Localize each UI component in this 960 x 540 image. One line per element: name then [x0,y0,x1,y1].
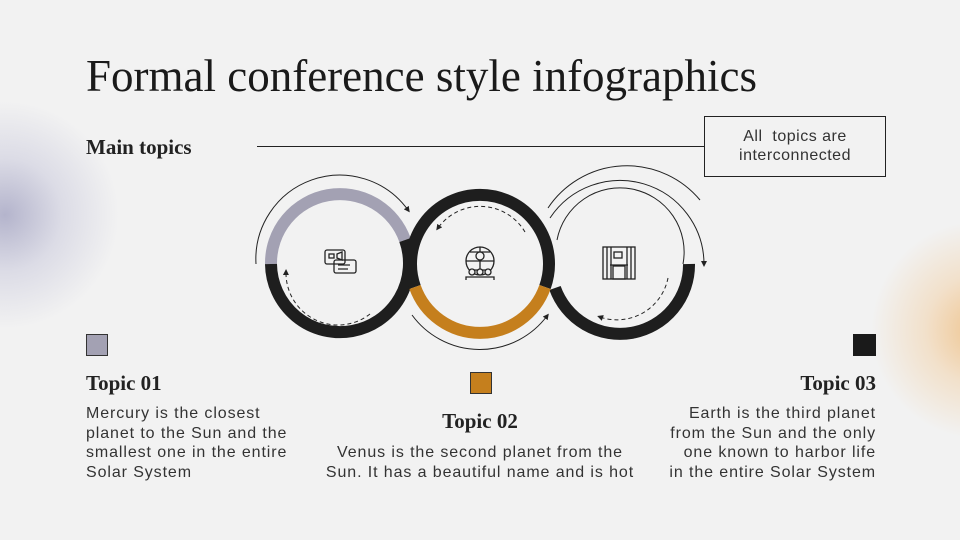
heading topic 01: Topic 01 [86,371,162,395]
text topic 03: one known to harbor life [684,444,876,461]
heading: main topics: Main topics [86,135,192,159]
text topic 01: planet to the Sun and the [86,424,287,442]
text topic 03: Earth is the third planet [689,405,876,422]
text topic 03: from the Sun and the only [670,424,876,442]
topic 02 [326,372,634,480]
text topic 01 [86,405,287,480]
callout box: All topics are [743,128,847,145]
icon: video chat [325,250,356,273]
ring 1 [256,175,409,332]
text topic 02: Venus is the second planet from the [337,444,623,461]
marker square 1 [86,334,108,356]
icon: stage podium [603,247,635,279]
text topic 03: in the entire Solar System [669,464,876,480]
text topic 03 [669,405,876,480]
divider line [257,146,705,147]
marker square 2 [470,372,492,394]
text topic 02: Sun. It has a beautiful name and is hot [326,464,634,480]
topic 01 [86,334,287,480]
ring 3 [548,166,704,334]
text topic 02 [326,444,634,480]
callout box: interconnected [739,147,851,164]
text topic 01: Solar System [86,464,192,480]
text topic 01: smallest one in the entire [86,444,287,461]
icon: globe with people [466,247,494,280]
marker square 3 [853,334,876,356]
heading topic 02: Topic 02 [442,409,518,433]
text topic 01: Mercury is the closest [86,405,261,422]
heading topic 03: Topic 03 [800,371,876,395]
callout box [704,116,886,177]
topic 03 [669,334,876,480]
ring 2 [411,195,549,350]
title: Formal conference style infographics [86,51,757,101]
